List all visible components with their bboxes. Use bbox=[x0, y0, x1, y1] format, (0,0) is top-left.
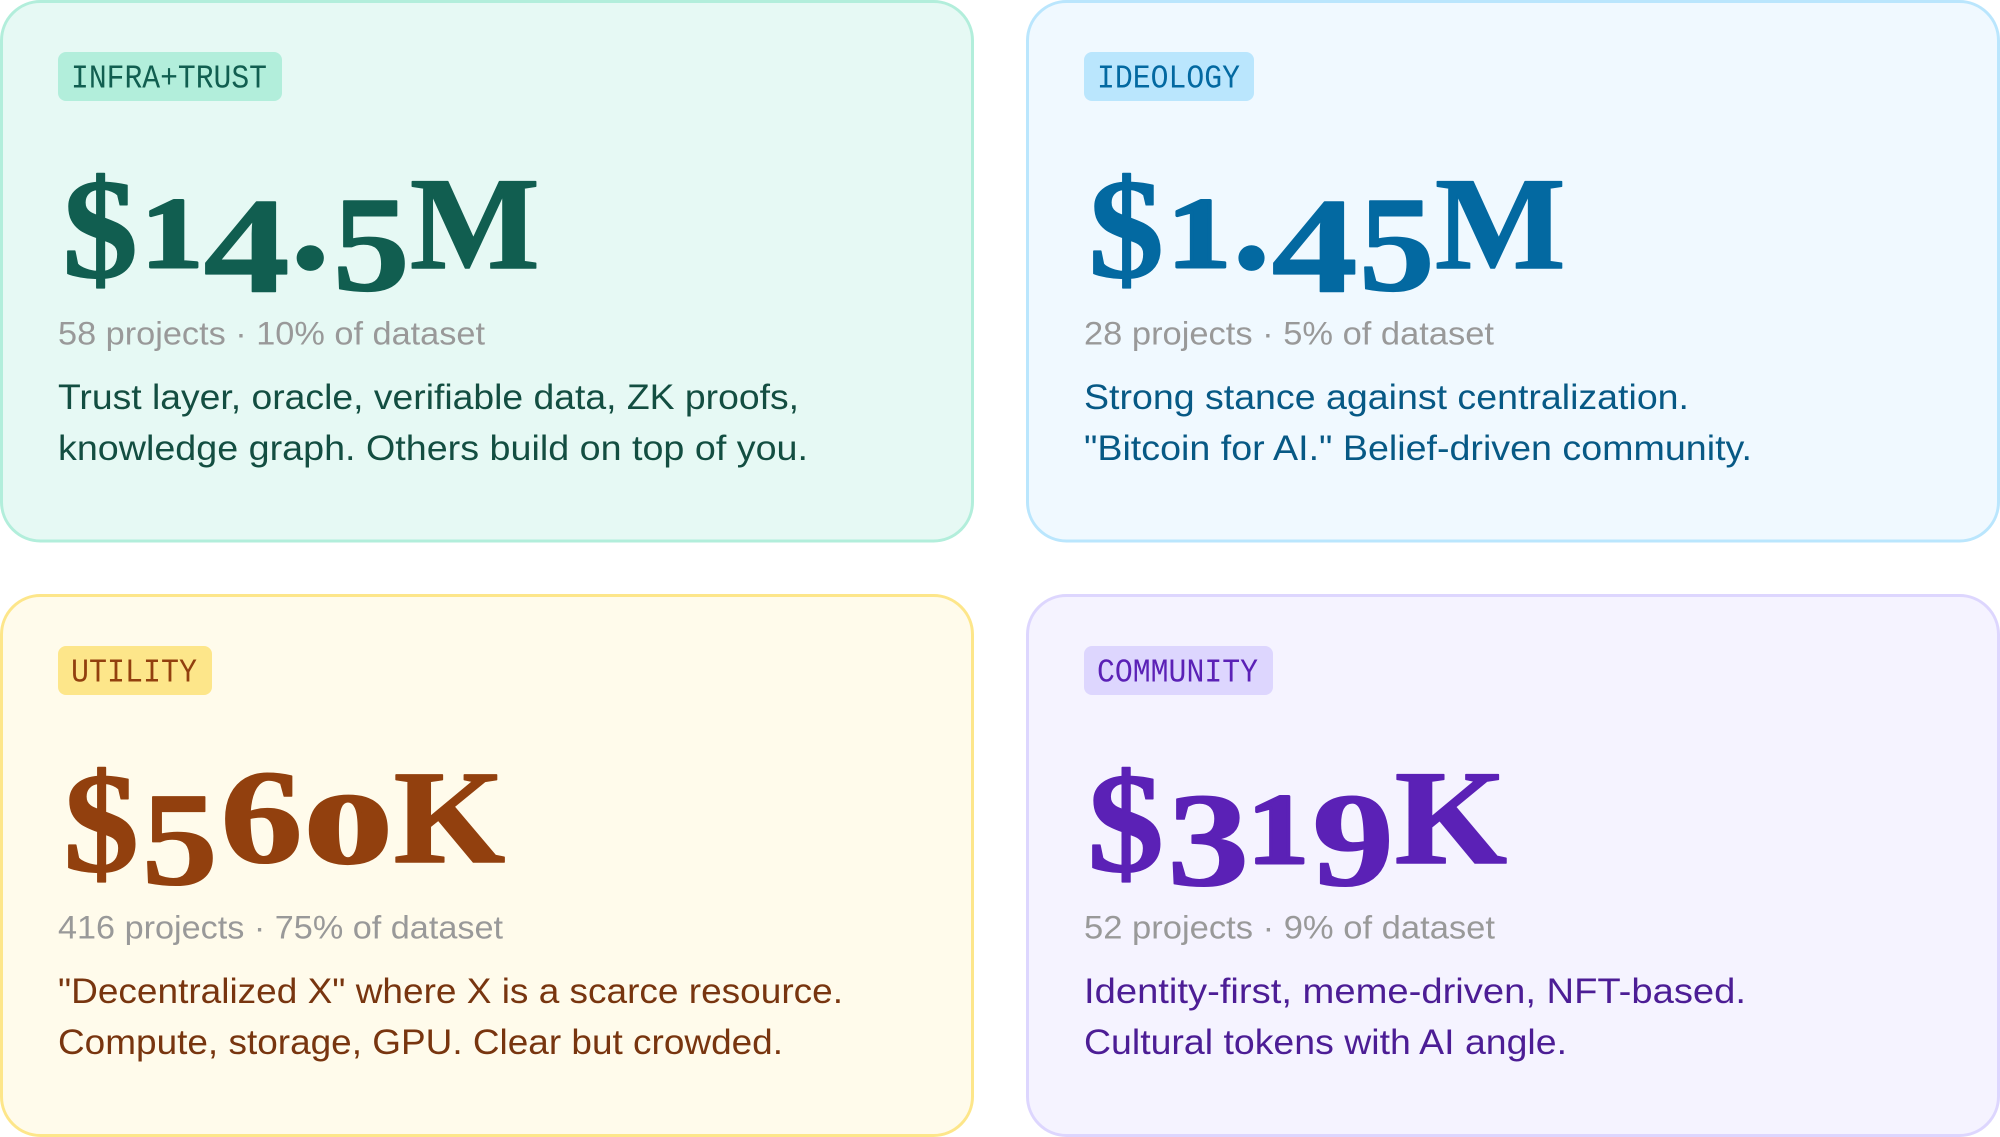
value: $560K: $ bbox=[64, 744, 139, 902]
panel: utility bbox=[2, 596, 972, 1136]
value: $1.45M: 1 bbox=[1167, 177, 1231, 289]
value: $14.5M bbox=[62, 136, 540, 322]
panel: infra+trust bbox=[2, 2, 972, 541]
value: $14.5M: 4 bbox=[204, 172, 290, 322]
value: $14.5M: 5 bbox=[333, 170, 410, 320]
value: $1.45M: $ bbox=[1088, 150, 1164, 308]
stat line: 58 projects · 10% of dataset bbox=[58, 316, 485, 352]
stat line: 52 projects · 9% of dataset bbox=[1084, 910, 1495, 946]
value: $1.45M bbox=[1088, 136, 1566, 322]
value: $319K: K bbox=[1395, 744, 1507, 893]
card background bbox=[2, 596, 972, 1136]
value: $560K: 5 bbox=[142, 765, 218, 913]
value: $319K: 9 bbox=[1312, 766, 1394, 914]
value: $14.5M: $ bbox=[62, 150, 138, 308]
description: knowledge graph. Others build on top of you. bbox=[58, 429, 808, 468]
value: $1.45M: . bbox=[1232, 136, 1270, 301]
description: Strong stance against centralization. bbox=[1084, 378, 1689, 417]
description: Cultural tokens with AI angle. bbox=[1084, 1023, 1567, 1062]
description: "Decentralized X" where X is a scarce resource. bbox=[58, 972, 843, 1011]
description: Trust layer, oracle, verifiable data, ZK proofs, bbox=[58, 378, 799, 417]
badge: community: COMMUNITY bbox=[1097, 654, 1258, 692]
description bbox=[58, 972, 843, 1062]
description bbox=[1084, 972, 1746, 1062]
stat line: 416 projects · 75% of dataset bbox=[58, 910, 503, 946]
badge: ideology bbox=[1084, 52, 1254, 101]
description: "Bitcoin for AI." Belief-driven community. bbox=[1084, 429, 1752, 468]
card background bbox=[1028, 596, 1998, 1136]
badge: infra+trust bbox=[58, 52, 282, 101]
badge: utility bbox=[58, 646, 212, 695]
description bbox=[1084, 378, 1752, 468]
description: Compute, storage, GPU. Clear but crowded. bbox=[58, 1023, 783, 1062]
value: $560K: 0 bbox=[305, 774, 392, 885]
value: $1.45M: 5 bbox=[1359, 170, 1435, 320]
badge: ideology: IDEOLOGY bbox=[1097, 60, 1240, 98]
stat line: 28 projects · 5% of dataset bbox=[1084, 316, 1494, 352]
value: $560K: K bbox=[394, 743, 505, 891]
description: Identity-first, meme-driven, NFT-based. bbox=[1084, 972, 1746, 1011]
panel: community bbox=[1028, 596, 1998, 1136]
card background bbox=[1028, 2, 1998, 541]
value: $14.5M: . bbox=[290, 136, 330, 301]
value: $319K: 1 bbox=[1247, 773, 1309, 885]
value: $560K: 6 bbox=[220, 743, 303, 891]
value: $14.5M: M bbox=[410, 150, 540, 297]
badge: community bbox=[1084, 646, 1273, 695]
panel: ideology bbox=[1028, 2, 1998, 541]
badge: infra+trust: INFRA+TRUST bbox=[71, 60, 267, 98]
value: $14.5M: 1 bbox=[141, 177, 203, 289]
value: $1.45M: 4 bbox=[1272, 172, 1358, 322]
card background bbox=[2, 2, 972, 541]
value: $319K: $ bbox=[1088, 744, 1164, 902]
value: $319K: 3 bbox=[1167, 766, 1249, 914]
value: $319K bbox=[1088, 744, 1507, 914]
badge: utility: UTILITY bbox=[71, 654, 197, 692]
value: $560K bbox=[64, 743, 505, 913]
description bbox=[58, 378, 808, 468]
value: $1.45M: M bbox=[1435, 150, 1566, 297]
